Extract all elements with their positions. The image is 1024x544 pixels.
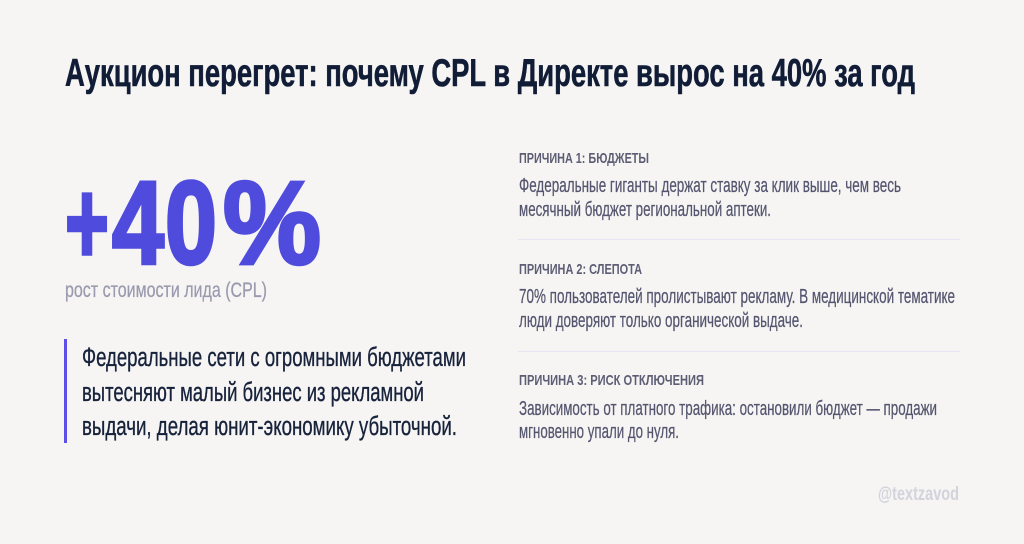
reason 2 heading: ПРИЧИНА 2: СЛЕПОТА bbox=[519, 261, 642, 278]
callout text: Федеральные сети с огромными бюджетами bbox=[82, 342, 466, 372]
reason 1 text: месячный бюджет региональной аптеки. bbox=[519, 199, 771, 221]
big stat: + bbox=[65, 158, 109, 290]
reason 3 text bbox=[519, 398, 937, 443]
reason 1 heading: ПРИЧИНА 1: БЮДЖЕТЫ bbox=[519, 150, 649, 167]
reason 2 text: люди доверяют только органической выдаче. bbox=[519, 310, 803, 332]
callout bbox=[64, 339, 466, 443]
reason 2 text bbox=[519, 286, 955, 332]
callout accent bar bbox=[64, 339, 67, 443]
panel: reason 3 bbox=[519, 372, 937, 443]
big stat: 4 bbox=[112, 158, 164, 290]
stat caption: рост стоимости лида (CPL) bbox=[65, 279, 267, 302]
reason 3 heading: ПРИЧИНА 3: РИСК ОТКЛЮЧЕНИЯ bbox=[519, 372, 704, 389]
reason 1 text bbox=[519, 175, 901, 221]
callout text: выдачи, делая юнит-экономику убыточной. bbox=[82, 411, 457, 441]
big stat: 0 bbox=[165, 158, 217, 290]
reason 3 text: мгновенно упали до нуля. bbox=[519, 421, 679, 443]
callout text: вытесняют малый бизнес из рекламной bbox=[82, 377, 424, 407]
panel: reason 2 bbox=[519, 261, 955, 332]
handle: @textzavod bbox=[878, 484, 959, 505]
panel: reason 1 bbox=[519, 150, 901, 221]
big stat: % bbox=[223, 158, 321, 290]
callout text bbox=[82, 342, 466, 441]
big stat bbox=[65, 158, 321, 290]
